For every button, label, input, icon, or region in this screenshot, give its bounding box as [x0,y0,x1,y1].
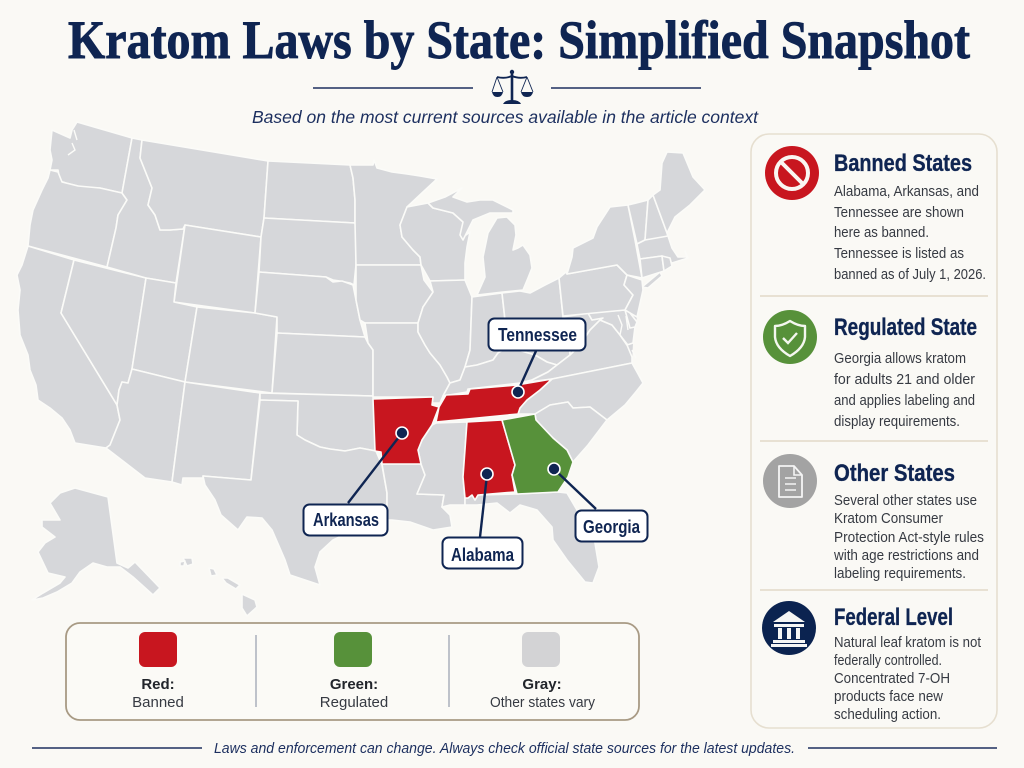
icon: document [763,454,817,508]
section: banned states: Tennessee are shown [834,204,964,221]
section: federal level: Concentrated 7-OH [834,670,950,687]
callout: Georgia [548,463,648,542]
section: regulated state: display requirements. [834,413,960,430]
map: United States [17,122,705,616]
legend item: red: Red: [141,676,175,693]
callout: Arkansas [304,427,408,536]
icon: prohibited sign [765,146,819,200]
section: other states: labeling requirements. [834,565,966,582]
section: banned states: Banned States [834,150,972,177]
state: Georgia [502,414,573,494]
icon: scales of justice [492,70,533,104]
callout: Alabama [442,468,522,568]
section: banned states: Alabama, Arkansas, and [834,183,979,200]
section: other states: Other States [834,460,955,487]
section: regulated state: and applies labeling and [834,392,975,409]
section: federal level: Natural leaf kratom is not [834,634,982,651]
legend item: gray: Other states vary [490,694,595,711]
section: federal level: Federal Level [834,604,953,631]
callout: Georgia: Georgia [583,517,641,537]
section: regulated state: Regulated State [834,314,977,341]
section: banned states [765,146,986,283]
legend item: green: Regulated [320,694,388,711]
icon: shield with check [763,310,817,364]
section: federal level: federally controlled. [834,652,942,669]
legend [66,623,639,720]
section: banned states: here as banned. [834,224,929,241]
section: federal level: products face new [834,688,943,705]
legend item: gray [490,632,595,711]
legend item: red: Banned [132,694,184,711]
callout: Tennessee: Tennessee [498,325,577,345]
footer note: Laws and enforcement can change. Always check official state sources for the latest updates. [214,741,795,757]
icon: government building [762,601,816,655]
legend item: gray: Gray: [522,676,562,693]
section: banned states: banned as of July 1, 2026. [834,266,986,283]
state: Tennessee [436,379,552,422]
section: other states: Protection Act-style rules [834,529,984,546]
section: other states: Kratom Consumer [834,510,943,527]
section: regulated state: Georgia allows kratom [834,350,966,367]
callout: Alabama: Alabama [451,545,515,565]
callout: Tennessee [488,318,586,398]
legend item: green [320,632,388,711]
state: Arkansas [373,397,439,464]
section: federal level [762,601,982,723]
subtitle: Based on the most current sources available in the article context [252,107,759,127]
panel: status summary [751,134,997,728]
legend item: green: Green: [330,676,378,693]
section: other states: Several other states use [834,492,977,509]
legend item: red [132,632,184,711]
section: regulated state: for adults 21 and older [834,371,975,388]
section: regulated state [763,310,977,430]
section: other states: with age restrictions and [833,547,979,564]
section: federal level: scheduling action. [834,706,941,723]
callout: Arkansas: Arkansas [313,510,379,530]
section: banned states: Tennessee is listed as [834,245,964,262]
state: Alabama [463,420,515,500]
section: other states [763,454,984,582]
